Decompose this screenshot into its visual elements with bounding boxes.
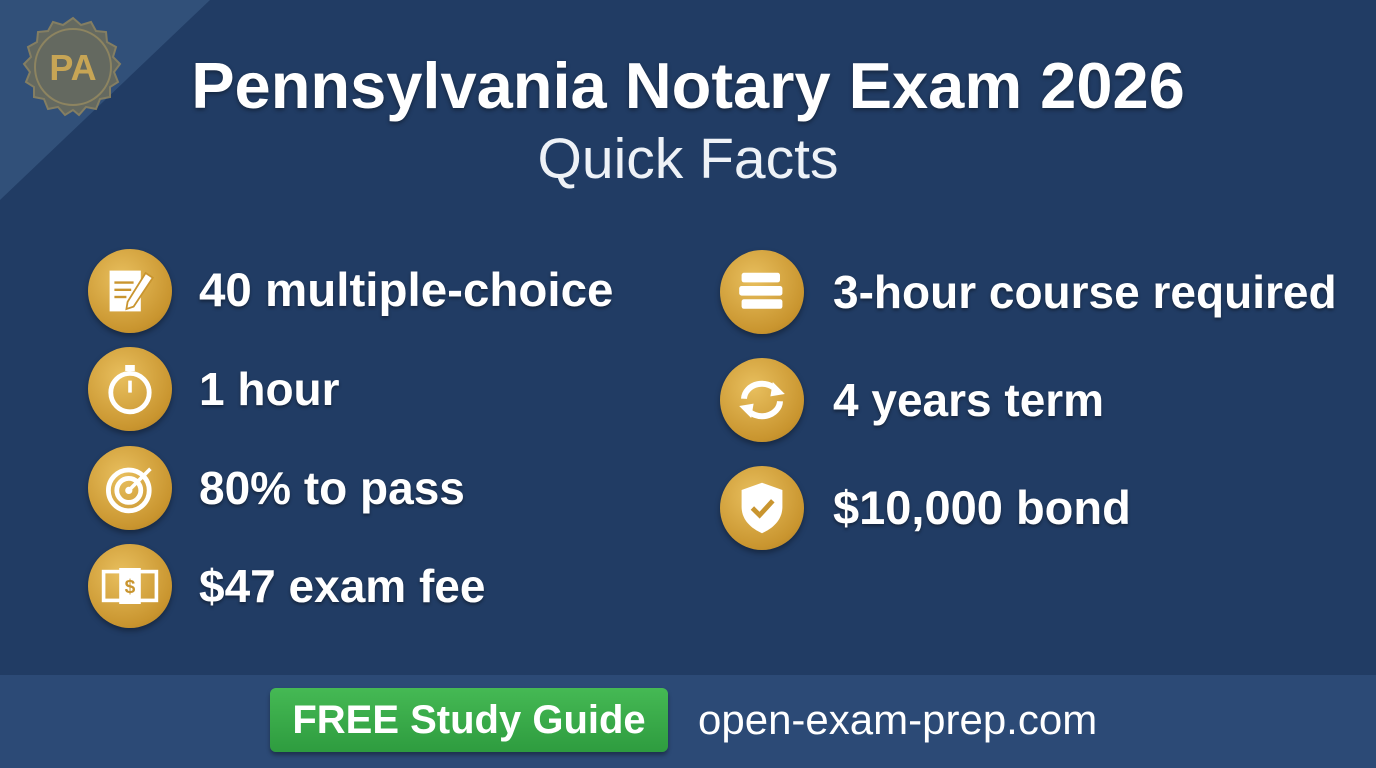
footer band xyxy=(0,675,1376,768)
fact: time xyxy=(86,347,340,436)
fact: bond xyxy=(718,466,1131,555)
fact: exam fee: $47 exam fee xyxy=(199,560,485,612)
icon: PA seal: PA xyxy=(49,47,97,88)
fact: pass score: 80% to pass xyxy=(199,462,465,514)
fact: questions xyxy=(86,249,613,338)
fact: course xyxy=(718,250,1337,339)
fact: pass score xyxy=(86,446,465,535)
fact: questions: 40 multiple-choice xyxy=(199,264,613,317)
fact: exam fee: $ xyxy=(125,577,136,598)
fact: term: 4 years term xyxy=(833,374,1104,426)
button: free study guide xyxy=(270,688,668,752)
website url: open-exam-prep.com xyxy=(698,696,1097,743)
fact: bond: $10,000 bond xyxy=(833,481,1131,534)
subtitle: Quick Facts xyxy=(538,127,838,191)
icon: PA seal xyxy=(22,16,122,116)
fact: term xyxy=(718,358,1104,447)
button: free study guide: FREE Study Guide xyxy=(292,698,646,742)
fact: exam fee xyxy=(86,544,485,633)
title: Pennsylvania Notary Exam 2026 xyxy=(191,49,1185,122)
fact: time: 1 hour xyxy=(199,363,340,415)
fact: course: 3-hour course required xyxy=(833,266,1337,318)
